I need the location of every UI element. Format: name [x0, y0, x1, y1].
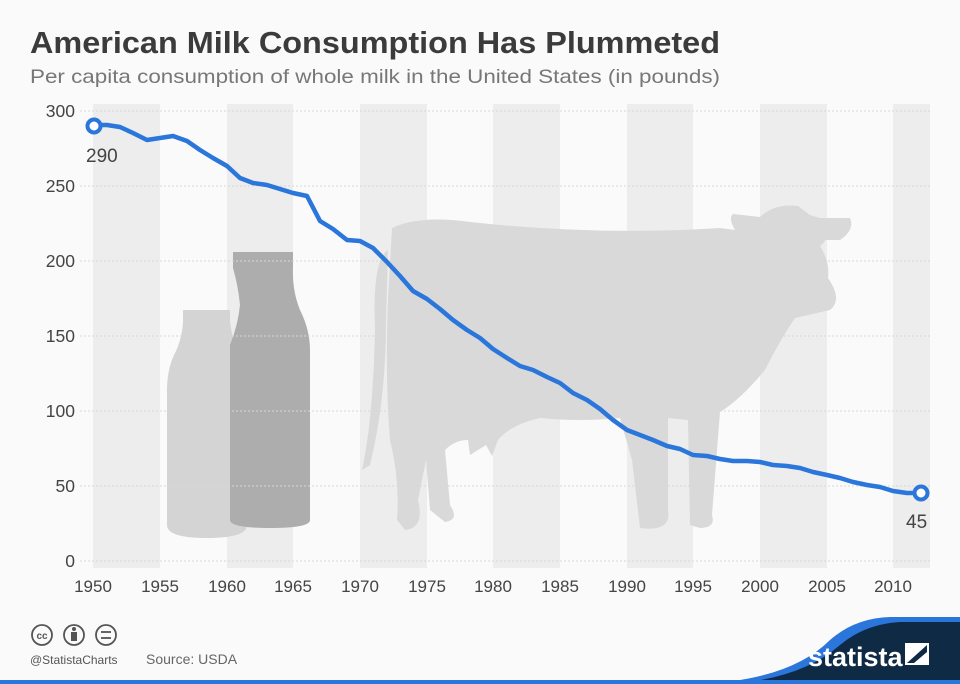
- x axis labels: 1980: [474, 577, 512, 596]
- y axis labels: 200: [46, 251, 75, 271]
- y axis labels: 100: [46, 401, 75, 421]
- x axis labels: 1955: [141, 577, 179, 596]
- icon: cow: [362, 205, 851, 530]
- label 45: 45: [906, 512, 927, 533]
- x axis labels: 1990: [608, 577, 646, 596]
- x axis labels: 1965: [274, 577, 312, 596]
- footer swoosh: [0, 617, 960, 684]
- x axis labels: 1995: [674, 577, 712, 596]
- x axis labels: [74, 577, 912, 596]
- x axis labels: 1960: [208, 577, 246, 596]
- icon: dark milk bottle: [230, 252, 310, 528]
- label 290: 290: [86, 146, 118, 167]
- title: American Milk Consumption Has Plummeted: [30, 25, 720, 60]
- y axis labels: 0: [65, 551, 75, 571]
- x axis labels: 2010: [874, 577, 912, 596]
- x axis labels: 2000: [741, 577, 779, 596]
- line series: [93, 125, 921, 493]
- x axis labels: 1975: [408, 577, 446, 596]
- y axis labels: 250: [46, 176, 75, 196]
- marker: 2012: [914, 486, 928, 500]
- x axis labels: 1950: [74, 577, 112, 596]
- x axis labels: 2005: [808, 577, 846, 596]
- x axis labels: 1985: [541, 577, 579, 596]
- credit and source: @StatistaCharts: [30, 653, 118, 667]
- icon: light milk bottle: [167, 310, 247, 538]
- icons: creative commons: cc: [36, 631, 48, 642]
- y axis labels: 150: [46, 326, 75, 346]
- subtitle: Per capita consumption of whole milk in the United States (in pounds): [30, 66, 720, 88]
- y axis labels: [46, 101, 75, 571]
- y axis labels: 300: [46, 101, 75, 121]
- chart: Source: USDA: [146, 651, 238, 667]
- marker: 1950: [88, 120, 100, 132]
- icons: creative commons: [32, 625, 116, 645]
- x axis labels: 1970: [341, 577, 379, 596]
- logo: statista: statista: [808, 642, 904, 672]
- y axis labels: 50: [56, 476, 75, 496]
